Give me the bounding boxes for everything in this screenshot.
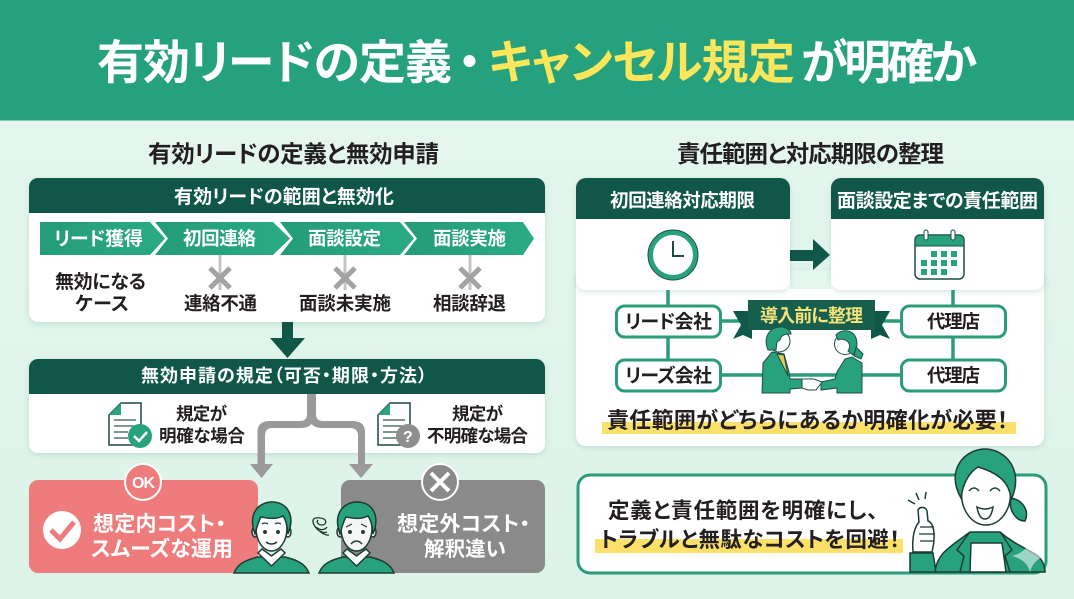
company and agency boxes: 代理店: [927, 311, 980, 332]
text: clear rules: 規定が: [176, 404, 228, 424]
arrow: branching grey arrows: [250, 394, 373, 478]
invalid case marks: [210, 255, 480, 290]
arrow: down to rules: [270, 322, 305, 358]
invalid case labels: ケース: [75, 293, 129, 315]
illustration: woman thumbs up: [908, 449, 1045, 572]
title banner: ・: [446, 36, 493, 89]
invalid case labels: 相談辞退: [433, 293, 506, 314]
unclear text: 解釈違い: [424, 538, 506, 561]
rules heading: 無効申請の規定（可否・期限・方法）: [141, 365, 427, 386]
callout: conclusion: [578, 449, 1046, 573]
text: unclear rules: [427, 404, 528, 446]
X badge: [422, 464, 458, 500]
illustration: handshake: [762, 327, 863, 393]
card: responsibility until interview: [831, 178, 1044, 290]
conclusion text: 定義と責任範囲を明確にし、: [608, 499, 878, 523]
highlighted message: 責任範囲がどちらにあるか明確化が必要！: [607, 408, 1008, 433]
card: first contact deadline: [576, 178, 790, 290]
company and agency boxes: [616, 306, 1006, 391]
OK text: [91, 513, 233, 561]
panel heading: 有効リードの範囲と無効化: [174, 186, 394, 208]
unclear text: 想定外コスト・: [397, 513, 530, 536]
title banner: [0, 0, 1074, 120]
unclear text: [397, 513, 530, 561]
process chevrons: 面談実施: [433, 228, 506, 249]
card: first contact deadline: 初回連絡対応期限: [610, 190, 755, 211]
panel: unclear outcome: [341, 464, 545, 573]
icon: document with question: ?: [403, 429, 413, 446]
heading: left column: 有効リードの定義と無効申請: [148, 141, 439, 167]
OK badge: [125, 464, 161, 500]
icon: confusion swirl: [313, 518, 329, 535]
sparkle watermark: [1012, 540, 1045, 572]
title banner: 有効リードの定義: [97, 36, 452, 89]
process chevrons: 面談設定: [308, 228, 381, 249]
icon: document with question: [378, 403, 420, 448]
title banner: が明確か: [801, 36, 977, 89]
heading: right column: 責任範囲と対応期限の整理: [677, 141, 944, 167]
OK text: スムーズな運用: [91, 537, 233, 561]
ribbon: organise before adoption: [733, 300, 890, 339]
icon: check: [43, 511, 81, 549]
icon: calendar: [915, 230, 964, 279]
process chevrons: 初回連絡: [183, 228, 256, 249]
company and agency boxes: リード会社: [625, 311, 712, 333]
icon: document with check: [109, 403, 152, 448]
process chevrons: [40, 222, 534, 255]
text: unclear rules: 規定が: [452, 404, 504, 424]
icon: clock: [648, 230, 698, 280]
company and agency boxes: リーズ会社: [625, 364, 712, 387]
conclusion text: [595, 499, 903, 553]
text: clear rules: 明確な場合: [159, 426, 246, 446]
person: worried man: [319, 502, 394, 573]
title banner: キャンセル規定: [488, 36, 795, 89]
arrow: to responsibility: [790, 239, 830, 270]
ribbon: organise before adoption: 導入前に整理: [760, 306, 863, 326]
OK badge: OK: [132, 475, 155, 492]
card: responsibility until interview: 面談設定までの責任範囲: [837, 190, 1038, 212]
panel: valid lead scope: [29, 178, 545, 322]
process chevrons: リード獲得: [54, 228, 143, 250]
OK text: 想定内コスト・: [93, 513, 226, 536]
panel: responsibility and deadline: [576, 178, 1044, 446]
panel: OK outcome: [29, 464, 258, 573]
conclusion text: トラブルと無駄なコストを回避！: [600, 527, 900, 552]
invalid case labels: 面談未実施: [299, 293, 391, 314]
company and agency boxes: 代理店: [927, 365, 980, 386]
text: unclear rules: 不明確な場合: [427, 426, 528, 446]
invalid case labels: 無効になる: [55, 271, 146, 293]
invalid case labels: 連絡不通: [184, 293, 257, 314]
invalid case labels: [55, 271, 506, 315]
panel: invalid application rules: [29, 359, 545, 453]
connector lines: [668, 290, 953, 375]
person: calm man: [234, 502, 309, 573]
text: clear rules: [159, 404, 246, 446]
